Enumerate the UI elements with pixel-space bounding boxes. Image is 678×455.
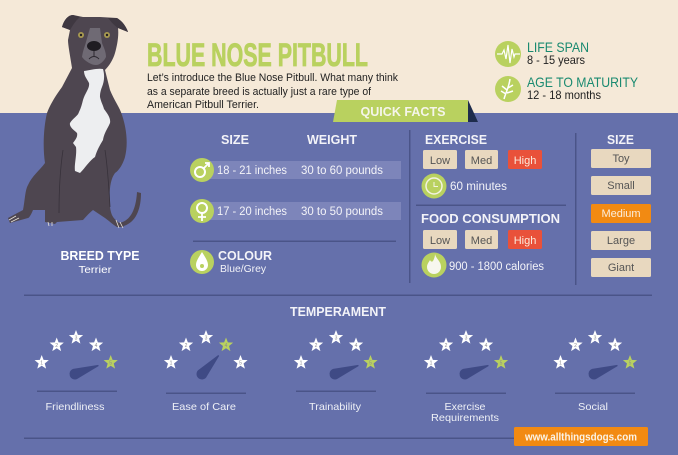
quick facts banner <box>333 100 478 122</box>
breed type: Terrier <box>78 264 112 276</box>
life span <box>495 39 589 67</box>
gauge: ease of care: 1 <box>170 360 173 366</box>
gauge: trainability: 2 <box>315 343 318 349</box>
panel: exercise: 60 minutes <box>450 181 507 193</box>
gauge: trainability: 4 <box>355 343 358 349</box>
food level buttons <box>423 230 542 249</box>
gauge: ease of care: Ease of Care <box>172 401 236 413</box>
gauge: exercise requirements <box>424 330 508 424</box>
gauge: exercise requirements: Requirements <box>431 412 499 424</box>
icon: clock <box>422 174 446 198</box>
size options: Toy <box>612 153 630 165</box>
colour <box>190 248 273 275</box>
colour: Blue/Grey <box>220 263 267 275</box>
age to maturity: AGE TO MATURITY <box>527 74 639 90</box>
breed type: BREED TYPE <box>60 249 140 263</box>
gauge: friendliness <box>35 330 118 413</box>
gauge: ease of care: 2 <box>185 343 188 349</box>
gauge: friendliness: 2 <box>55 343 58 349</box>
gauge: friendliness: 1 <box>40 360 43 366</box>
life span: LIFE SPAN <box>527 39 589 55</box>
intro text: as a separate breed is actually just a rare type of <box>147 86 372 98</box>
icon: flame <box>422 252 446 278</box>
gauge: social: 3 <box>594 336 597 342</box>
gauge: trainability: 1 <box>300 360 303 366</box>
gauge: social: 4 <box>614 343 617 349</box>
exercise level buttons: High <box>514 155 536 167</box>
size and weight headings <box>221 132 357 147</box>
age to maturity <box>495 74 639 102</box>
food level buttons: Med <box>471 235 492 247</box>
panel: exercise: EXERCISE <box>425 132 487 147</box>
gauge: exercise requirements: 4 <box>485 343 488 349</box>
website badge: www.allthingsdogs.com <box>524 432 637 444</box>
food level buttons: Low <box>430 235 450 247</box>
size options: Medium <box>601 208 641 220</box>
gauge: trainability: 3 <box>335 336 338 342</box>
breed type <box>60 249 140 276</box>
gauge: social: Social <box>578 401 608 413</box>
intro text: Let’s introduce the Blue Nose Pitbull. What many think <box>147 72 398 84</box>
female row <box>190 199 401 223</box>
intro text: American Pitbull Terrier. <box>147 99 259 111</box>
temperament heading: TEMPERAMENT <box>290 304 386 319</box>
gauge: social: 2 <box>574 343 577 349</box>
panel: size and weight <box>190 132 401 275</box>
colour: COLOUR <box>218 248 273 263</box>
quick facts banner: QUICK FACTS <box>360 104 446 119</box>
size and weight headings: SIZE <box>221 132 249 147</box>
panel: food consumption <box>421 211 560 278</box>
male row: 30 to 60 pounds <box>301 165 383 177</box>
female row: 30 to 50 pounds <box>301 206 383 218</box>
male row: 18 - 21 inches <box>217 165 287 177</box>
gauge: social <box>553 330 637 413</box>
food level buttons: High <box>514 235 536 247</box>
panel: food consumption: FOOD CONSUMPTION <box>421 211 560 226</box>
exercise level buttons: Low <box>430 155 450 167</box>
gauge: exercise requirements: 2 <box>445 343 448 349</box>
size and weight headings: WEIGHT <box>307 132 357 147</box>
size options: Large <box>607 235 635 247</box>
life span: 8 - 15 years <box>527 53 585 67</box>
gauge: friendliness: 3 <box>75 336 78 342</box>
gauge: trainability <box>294 330 378 413</box>
gauge: friendliness: 4 <box>95 343 98 349</box>
panel: food consumption: 900 - 1800 calories <box>449 261 544 273</box>
gauge: trainability: 5 <box>369 360 372 366</box>
gauge: ease of care: 3 <box>205 336 208 342</box>
age to maturity: 12 - 18 months <box>527 88 601 102</box>
size options: Small <box>607 180 635 192</box>
gauge: exercise requirements: 3 <box>465 336 468 342</box>
gauge: exercise requirements: 1 <box>430 360 433 366</box>
illustration: blue nose pitbull dog <box>8 15 141 228</box>
title: BLUE NOSE PITBULL <box>147 37 368 73</box>
gauge: trainability: Trainability <box>309 401 362 413</box>
exercise level buttons <box>423 150 542 169</box>
panel: size scale <box>591 132 651 277</box>
panel: size scale: SIZE <box>607 132 634 147</box>
gauge: friendliness: 5 <box>109 360 112 366</box>
intro text <box>147 72 398 111</box>
male row <box>190 158 401 182</box>
gauge: social: 1 <box>559 360 562 366</box>
gauge: exercise requirements: 5 <box>500 360 503 366</box>
gauge: ease of care <box>164 330 248 413</box>
gauge: ease of care: 4 <box>225 343 228 349</box>
female row: 17 - 20 inches <box>217 206 287 218</box>
gauge: ease of care: 5 <box>239 360 242 366</box>
website badge <box>514 427 648 446</box>
gauge: exercise requirements: Exercise <box>444 401 486 413</box>
size options <box>591 149 651 277</box>
panel: exercise <box>422 132 542 198</box>
gauge: friendliness: Friendliness <box>46 401 104 413</box>
exercise level buttons: Med <box>471 155 492 167</box>
size options: Giant <box>608 262 634 274</box>
gauge: social: 5 <box>629 360 632 366</box>
